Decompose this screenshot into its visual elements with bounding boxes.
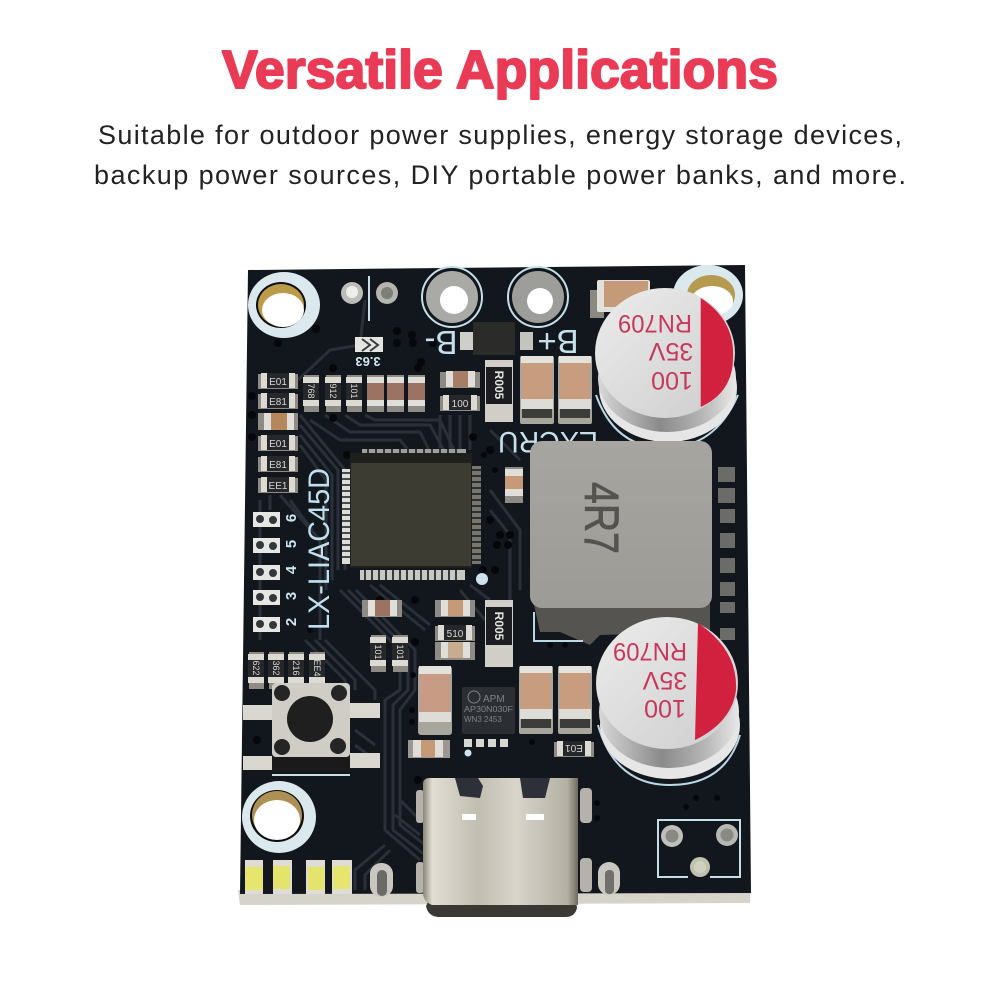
resistor E01 lower: E01 [565, 742, 583, 753]
ceramic capacitors lower pair [519, 666, 592, 734]
small through-hole pads [341, 276, 398, 321]
ceramic capacitor top [590, 280, 650, 318]
middle component cluster: 101 [395, 644, 405, 660]
USB-C connector [423, 778, 578, 917]
vias [248, 325, 720, 821]
electrolytic capacitor: top: 35V [648, 337, 693, 365]
title: Versatile Applications [222, 40, 778, 100]
resistor column: E81 [269, 460, 287, 471]
MOSFET AP30N030F: AP30N030F [464, 704, 513, 714]
electrolytic capacitor: top: 100 [651, 366, 693, 394]
header pads 2 to 6: 5 [283, 540, 300, 548]
capacitor footprint arc top [596, 395, 738, 448]
description text: backup power sources, DIY portable power banks, and more. [94, 160, 906, 190]
header pads 2 to 6: 4 [283, 565, 300, 574]
board substrate [240, 265, 751, 894]
label: B+: B+ [537, 323, 579, 360]
MOSFET AP30N030F: APM [483, 694, 505, 705]
mounting hole: top left [248, 272, 320, 338]
resistor row by button [248, 652, 325, 689]
status LEDs [245, 860, 352, 894]
current sense resistor: R005 lower: R005 [492, 612, 506, 641]
middle component cluster [362, 600, 475, 672]
USB-C side pads [416, 788, 592, 893]
resistor row by button: 362 [271, 660, 281, 676]
top resistor and capacitor row: 912 [328, 383, 338, 399]
header pads 2 to 6: 2 [283, 618, 300, 626]
current sense resistor: R005 lower [485, 600, 513, 667]
pad with 3.63 label: 3.63 [355, 354, 381, 369]
electrolytic capacitor: lower: RN709 [613, 637, 687, 665]
mounting hole: top right [673, 265, 743, 325]
resistor row by button: 622 [251, 660, 261, 676]
header pads 2 to 6: 3 [283, 592, 300, 600]
power inductor 4R7: 4R7 [574, 482, 627, 554]
electrolytic capacitor: lower: 35V [642, 666, 687, 694]
circuit board [238, 265, 751, 917]
top resistor and capacitor row: 101 [349, 383, 359, 399]
pad with 3.63 label [355, 337, 383, 369]
description text: Suitable for outdoor power supplies, energy storage devices, [98, 120, 902, 150]
slot pad left [370, 863, 393, 897]
header pads 2 to 6 [253, 512, 300, 632]
copper traces [260, 300, 520, 890]
header pads 2 to 6: 6 [283, 514, 300, 522]
resistor E01 lower [554, 741, 594, 757]
capacitor footprint arc [598, 725, 740, 785]
top resistor and capacitor row: 768 [306, 383, 316, 399]
transistor [460, 322, 533, 355]
capacitor and 100 resistor: 100 [452, 399, 469, 410]
electrolytic capacitor: lower: 100 [644, 694, 686, 722]
tactile push button [243, 683, 380, 776]
electrolytic capacitor: top [595, 288, 737, 442]
board label: LX-LIAC45D: LX-LIAC45D [303, 468, 336, 630]
MOSFET AP30N030F: WN3 2453 [464, 715, 502, 724]
battery pad: B- [422, 267, 482, 327]
description text [94, 120, 906, 190]
resistor column: EE1 [269, 481, 288, 492]
large ceramic capacitor [408, 666, 452, 758]
mounting hole: bottom left [242, 781, 316, 853]
resistor column: E81 [269, 397, 287, 408]
top resistor and capacitor row [303, 375, 425, 412]
small capacitor [505, 467, 523, 503]
board label: EXCRU: EXCRU [498, 425, 598, 458]
resistor column [258, 373, 298, 493]
resistor row by button: 216 [291, 660, 301, 676]
main microcontroller [340, 448, 482, 581]
middle component cluster: 510 [447, 629, 464, 640]
electrolytic capacitor: lower [596, 617, 740, 779]
board edge [238, 885, 751, 905]
resistor column: E01 [269, 439, 287, 450]
capacitor and 100 resistor [440, 371, 480, 411]
ceramic capacitors top pair [520, 356, 592, 424]
current sense resistor: R005 top: R005 [492, 371, 506, 400]
label: B-: B- [424, 324, 458, 361]
right edge pads [718, 467, 735, 640]
inductor footprint line [534, 612, 583, 641]
current sense resistor: R005 top [485, 360, 513, 422]
slot pad right [598, 862, 620, 895]
middle component cluster: 101 [373, 644, 383, 660]
resistor column: E01 [269, 377, 287, 388]
electrolytic capacitor: top: RN709 [618, 309, 692, 337]
resistor row by button: EE4 [312, 659, 322, 677]
fiducial dot [476, 573, 488, 585]
fiducial dot lower [464, 750, 472, 756]
bottom right connector footprint [658, 820, 740, 877]
power inductor 4R7 [530, 441, 712, 645]
battery pad: B+ [508, 267, 568, 327]
MOSFET AP30N030F [462, 687, 515, 747]
